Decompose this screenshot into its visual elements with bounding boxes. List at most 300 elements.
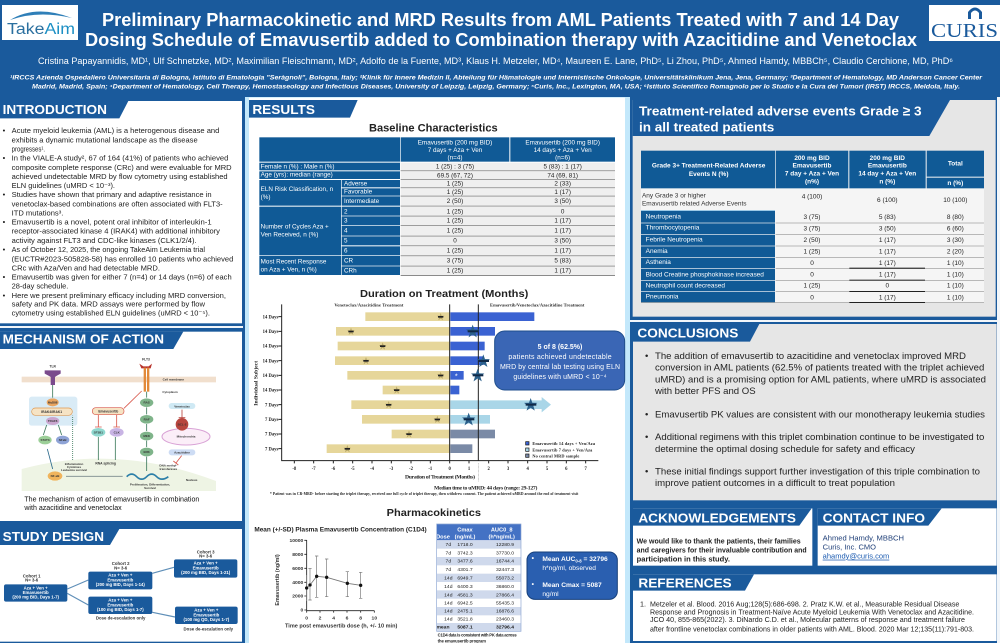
table: baseline characteristics: 3 (75) <box>447 258 463 265</box>
line chart: plasma concentration: 8 <box>359 615 362 621</box>
table: PK parameters: 14d <box>444 584 453 590</box>
introduction bullet text: Acute myeloid leukemia (AML) is a heterogenous disease and <box>12 126 219 135</box>
mechanism caption <box>23 495 199 512</box>
cohort flow boxes: Aza + Ven + <box>108 598 133 603</box>
introduction bullet text: ITD mutations³. <box>12 208 63 217</box>
signalling nodes: Mitochondria <box>177 435 196 439</box>
table: baseline characteristics: Intermediate <box>344 198 380 205</box>
table: PK parameters: 7d <box>446 559 451 565</box>
title <box>85 10 917 50</box>
panel: treatment-related adverse events <box>633 100 996 317</box>
table: adverse events: Anemia <box>646 248 668 255</box>
table: adverse events: 1 (25) <box>804 248 820 255</box>
table: PK parameters: 6949.7 <box>457 576 473 582</box>
table: baseline characteristics: 2 (33) <box>554 181 571 188</box>
introduction bullet text: • <box>3 245 6 254</box>
table: baseline characteristics: 1 (17) <box>554 228 571 235</box>
axis labels: Individual Subject <box>253 361 259 406</box>
table: baseline characteristics: 2 (50) <box>447 198 463 205</box>
table: adverse events: 1 (10) <box>947 294 964 301</box>
table: adverse events: 1 (17) <box>879 271 896 278</box>
signalling nodes: Nucleus <box>186 478 198 482</box>
axis labels: -6 <box>331 467 336 472</box>
signalling nodes: Venetoclax <box>174 404 190 408</box>
panel: contact info: CONTACT INFO <box>823 510 925 525</box>
uMRD stars <box>462 325 537 425</box>
table: PK parameters: (ng/mL) <box>455 535 475 541</box>
introduction bullet text: progresses¹. <box>12 144 45 153</box>
introduction bullet text: • <box>3 217 6 226</box>
callout: mean PK values: Mean AUC <box>542 556 575 563</box>
introduction bullet text: composite complete response (CRc) and were evaluable for MRD <box>12 163 232 172</box>
table: baseline characteristics: 1 (25) <box>447 228 463 235</box>
cohort flow boxes: (100 mg QD, Days 1-7) <box>183 617 230 622</box>
chart legend <box>526 441 596 458</box>
table: adverse events: 8 (80) <box>947 214 964 221</box>
logo: Curis: CURIS <box>931 20 998 42</box>
table: adverse events: Neutropenia <box>646 214 681 221</box>
table: PK parameters: (h*ng/mL) <box>488 535 515 541</box>
table: adverse events: Any Grade 3 or higher <box>642 192 707 199</box>
panel: conclusions: Emavusertib PK values are consistent with our monotherapy leukemia studies <box>655 409 985 420</box>
table: adverse events: 2 (50) <box>804 237 820 244</box>
table: adverse events: Febrile Neutropenia <box>646 237 703 244</box>
panel: contact info: ahamdy@curis.com <box>823 552 889 561</box>
axis labels: 7 Days <box>265 447 279 452</box>
table: baseline characteristics: 1 (25) <box>447 248 463 255</box>
table: adverse events: Total <box>948 160 963 167</box>
introduction bullet text: • <box>3 154 6 163</box>
table: adverse events: 1 (10) <box>947 260 964 267</box>
cohort labels: N= 3-6 <box>199 554 213 559</box>
panel: study design <box>0 529 242 642</box>
table: adverse events: 200 mg BID <box>870 155 905 162</box>
table: PK parameters: 3742.3 <box>457 550 473 556</box>
table: baseline characteristics: ELN Risk Classification, n <box>261 186 334 193</box>
heading: baseline characteristics: Baseline Characteristics <box>369 122 498 134</box>
table: PK parameters: 36860.0 <box>496 584 514 590</box>
line chart: plasma concentration: 4 <box>332 615 335 621</box>
cohort flow boxes: (200 mg BID, Days 1-14) <box>96 582 145 587</box>
table: adverse events: Grade 3+ Treatment-Related Adverse <box>652 163 766 170</box>
callout: 5 of 8 uMRD <box>495 331 625 390</box>
chart phase labels: Venetoclax/Azacitidine Treatment <box>334 302 404 307</box>
cohort flow boxes <box>4 559 238 624</box>
table: adverse events: Pneumonia <box>646 294 679 301</box>
table: baseline characteristics: on Aza + Ven, n (%) <box>261 267 317 274</box>
panel: contact info: Ahmed Hamdy, MBBCH <box>823 533 904 542</box>
panel: acknowledgements: participation in this study. <box>637 556 730 563</box>
line chart: plasma concentration: Emavusertib (ng/ml) <box>275 554 281 606</box>
callout: mean PK values: • <box>532 581 535 588</box>
table: adverse events: 1 (25) <box>804 283 820 290</box>
table: baseline characteristics: 1 (25) <box>447 268 463 275</box>
table: adverse events: 3 (75) <box>804 214 820 221</box>
header band <box>0 0 1000 97</box>
panel: acknowledgements: and caregivers for their invaluable contribution and <box>637 548 807 555</box>
chart phase labels: Emavusertib/Venetoclax/Azacitidine Treatment <box>490 302 585 307</box>
signalling nodes: RNA splicing <box>95 461 116 465</box>
chart phase labels <box>334 302 585 307</box>
heading: adverse events <box>633 100 950 136</box>
table: PK parameters: 55073.2 <box>496 576 514 582</box>
authors: Cristina Papayannidis, MD¹, Ulf Schnetzke, MD², Maximilian Fleischmann, MD², Adolfo de la Fuente, MD³, Klaus H. Metzeler, MD⁴, Maureen E. Lane, PhD⁵, Li Zhou, PhD⁵, Ahmed Hamdy, MBBCh⁵, Claudio Cerchione, MD, PhD⁶ <box>38 56 953 66</box>
panel: conclusions: determine the optimal dosing schedule for safety and efficacy <box>655 444 915 455</box>
table: adverse events: 1 (17) <box>879 294 896 301</box>
axis labels: 14 Days <box>263 389 279 394</box>
callout: mean PK values: 0-8 <box>575 558 582 563</box>
cohort labels <box>23 549 234 631</box>
cohort flow arrows <box>67 567 175 617</box>
table: adverse events: Emavusertib <box>793 163 831 170</box>
signalling nodes: NFκB <box>59 438 67 442</box>
table: PK parameters: 32796.4 <box>496 625 514 631</box>
introduction bullet text: Emavusertib is a novel, potent oral inhibitor of interleukin-1 <box>12 217 212 226</box>
callout: mean PK values: Mean Cmax = 5087 <box>542 582 602 589</box>
PK table footnote <box>438 632 517 643</box>
introduction bullet text: ELN guidelines (uMRD < 10⁻³). <box>12 181 115 190</box>
cohort labels: N= 3-6 <box>114 565 128 570</box>
table: adverse events: 3 (50) <box>879 226 896 233</box>
cohort flow boxes: Aza + Ven + <box>108 573 133 578</box>
chart legend: Emavusertib 7 days + Ven/Aza <box>532 447 593 452</box>
line chart: plasma concentration: 4000 <box>292 580 304 586</box>
axis labels: 5 <box>546 467 549 472</box>
mechanism caption: with azacitidine and venetoclax <box>23 504 122 512</box>
receptor: FLT3 <box>139 358 152 392</box>
table: baseline characteristics: (n=4) <box>448 155 462 162</box>
heading: adverse events: Treatment-related adverse events Grade ≥ 3 <box>639 104 922 119</box>
axis labels: Median time to uMRD: 44 days (range: 29-127) <box>434 484 537 491</box>
table: PK parameters: 14d <box>444 576 453 582</box>
introduction bullet text: • <box>3 126 6 135</box>
callout: 5 of 8 uMRD: MRD by central lab testing using ELN <box>500 364 620 371</box>
logo: TakeAim: Take Aim <box>7 21 75 38</box>
cohort labels: Cohort 1 <box>23 573 41 578</box>
heading: results <box>249 100 358 118</box>
pathway arrows <box>43 385 185 476</box>
signalling nodes: MEK <box>143 434 151 438</box>
panel: conclusions: • <box>645 351 648 362</box>
table: PK parameters: Cmax <box>457 528 474 534</box>
table: baseline characteristics: 74 (69, 81) <box>547 173 578 180</box>
panel: conclusions: improve patient outcomes in a difficult to treat population <box>655 478 895 489</box>
heading: pharmacokinetics: Pharmacokinetics <box>387 508 481 519</box>
table: PK parameters: 4581.3 <box>457 592 473 598</box>
mechanism caption: The mechanism of action of emavusertib in combination <box>24 495 199 503</box>
heading: introduction: INTRODUCTION <box>3 102 107 117</box>
table: baseline characteristics: 3 (50) <box>554 198 571 205</box>
panel: results <box>245 97 630 643</box>
table: baseline characteristics: Number of Cycles Aza + <box>261 224 329 231</box>
panel: conclusions: • <box>645 409 648 420</box>
signalling nodes: NF-κB <box>51 474 60 478</box>
introduction bullet text: venetoclax-based combinations are often associated with FLT3- <box>12 199 223 208</box>
cohort labels: Cohort 3 <box>197 549 215 554</box>
introduction bullet text: CRc with Aza/Ven and had detectable MRD. <box>12 263 160 272</box>
cohort flow boxes: Aza + Ven + <box>24 585 48 590</box>
table: PK parameters: 5087.1 <box>457 625 473 631</box>
table: adverse events: Emavusertib <box>868 163 907 170</box>
title: Dosing Schedule of Emavusertib added to Combination therapy with Azacitidine and Venetoclax <box>85 30 917 50</box>
axis labels: 14 Days <box>263 315 279 320</box>
table: baseline characteristics: 1 (25) <box>447 181 463 188</box>
panel: references <box>633 574 997 641</box>
panel: conclusions: uMRD) and is a promising option for AML patients, where uMRD is associated <box>655 375 986 386</box>
line chart: plasma concentration: 0 <box>301 608 304 614</box>
table: adverse events: Neutrophil count decreased <box>646 282 725 289</box>
cohort flow boxes: Emavusertib <box>107 577 134 582</box>
axis labels <box>253 315 587 496</box>
table: baseline characteristics: 5 <box>344 238 348 245</box>
introduction bullet text: achieved undetectable MRD by flow cytometry using established <box>12 172 228 181</box>
table: adverse events: 1 (10) <box>947 271 964 278</box>
table: PK parameters: 14d <box>444 601 453 607</box>
table: adverse events: 0 <box>810 271 814 278</box>
axis labels: 7 Days <box>265 418 279 423</box>
introduction bullet text: receptor-associated kinase 4 (IRAK4) with additional inhibitory <box>12 227 220 236</box>
logo: TakeAim <box>2 5 78 40</box>
table: PK parameters: 23460.3 <box>496 617 514 623</box>
panel: references: REFERENCES <box>638 576 732 591</box>
table: baseline characteristics: 1 (17) <box>554 218 571 225</box>
table: PK parameters: 37730.0 <box>496 550 514 556</box>
table: PK parameters: 4301.7 <box>457 567 473 573</box>
axes <box>278 304 598 463</box>
table: PK parameters: 14d <box>444 617 453 623</box>
panel: conclusions: conversion in AML patients (62.5% of patients treated with the triplet achieved <box>655 363 984 374</box>
line chart: plasma concentration: 2 <box>319 615 322 621</box>
signalling nodes: IRAK4/IRAK1 <box>41 410 62 414</box>
heading: mechanism of action: MECHANISM OF ACTION <box>3 331 164 346</box>
signalling nodes: Leukemia survival <box>61 468 87 472</box>
signalling nodes: ERK <box>144 450 151 454</box>
callout: mean PK values: ng/ml <box>542 591 559 598</box>
cohort flow boxes: (100 mg BID, Days 1-7) <box>97 607 144 612</box>
callout: mean PK values: • <box>532 555 535 562</box>
table: baseline characteristics: 1 (25) : 3 (75) <box>436 164 474 171</box>
table: baseline characteristics: Adverse <box>344 181 368 188</box>
panel: acknowledgements: We would like to thank the patients, their families <box>637 538 801 545</box>
axis labels: 7 Days <box>265 403 279 408</box>
affiliations <box>10 74 983 90</box>
panel: conclusions: The addition of emavusertib to azacitidine and venetoclax improved MRD <box>655 351 966 362</box>
cohort flow boxes: Emavusertib <box>23 590 49 595</box>
chart legend: No central MRD sample <box>532 453 579 458</box>
signalling nodes: Azacitidine <box>174 451 190 455</box>
cohort flow boxes: Emavusertib <box>193 612 220 617</box>
line chart: plasma concentration <box>254 527 427 630</box>
signalling nodes: Proliferation, Differentiation, <box>130 483 170 487</box>
table: PK parameters: 7d <box>446 550 451 556</box>
signalling nodes: MyD88 <box>48 400 58 404</box>
introduction bullet text: (EUCTR#2023-505828-58) has enrolled 10 patients who achieved <box>12 254 233 263</box>
panel: acknowledgements <box>633 508 812 566</box>
table: baseline characteristics: 1 (17) <box>554 248 571 255</box>
axis labels: 4 <box>526 467 529 472</box>
affiliations: ¹IRCCS Azienda Ospedaliero Universitaria di Bologna, Istituto di Ematologia "Seràgnoli", Bologna, Italy; ²Klinik für Innere Medizin II, Abteilung für Hämatologie und Internistische Onkologie, Universitätsklinikum Jena, Jena, Germany; ³Department of Hematology, MD Anderson Cancer Center <box>10 74 983 82</box>
signalling nodes: TRAF6 <box>48 419 58 423</box>
signalling nodes: CLK <box>114 430 121 434</box>
logo: Curis <box>929 5 1000 42</box>
table: PK parameters <box>436 524 521 631</box>
cohort flow boxes: Emavusertib <box>193 565 219 570</box>
axis labels: 14 Days <box>263 330 279 335</box>
heading: introduction <box>0 101 128 118</box>
mechanism diagram <box>22 358 216 512</box>
introduction bullet text: exhibits a dynamic mutational landscape as the disease <box>12 135 198 144</box>
table: PK parameters: 16876.6 <box>496 609 514 615</box>
table: baseline characteristics: 1 (25) <box>447 218 463 225</box>
table: PK parameters: 7d <box>446 567 451 573</box>
affiliations: Madrid, Madrid, Spain; ⁴Department of Hematology, Cell Therapy, Hemostaseology and Infectious Diseases, University of Leipzig, Leipzig, Germany; ⁵Curis, Inc., Lexington, MA, USA; ⁶Istituto Scientifico Romagnolo per lo Studio e la Cura dei Tumori (IRST) IRCCS, Meldola, Italy. <box>32 84 960 90</box>
table: adverse events: 1 (10) <box>947 283 964 290</box>
table: PK parameters: mean <box>436 625 450 631</box>
introduction bullet text: Studies have shown that primary and adaptive resistance in <box>12 190 212 199</box>
signalling nodes: RAF <box>144 417 150 421</box>
table: PK parameters: 32447.3 <box>496 567 514 573</box>
axis labels: 6 <box>565 467 568 472</box>
table: baseline characteristics <box>259 137 615 276</box>
table: adverse events: Events N (%) <box>689 171 728 178</box>
line chart: plasma concentration: 8000 <box>292 552 304 558</box>
table: adverse events: n (%) <box>879 178 895 185</box>
table: adverse events: Emavusertib related Adverse Events <box>642 200 747 207</box>
axis labels: 7 Days <box>265 433 279 438</box>
panel: references: Metzeler et al. Blood. 2016 Aug;128(5):686-698. 2. Pratz K.W. et al., Measurable Residual Disease <box>650 601 959 609</box>
introduction bullet text: As of October 12, 2025, the ongoing TakeAim Leukemia trial <box>12 245 205 254</box>
emavusertib treatment bars: * <box>455 371 458 380</box>
line chart: plasma concentration: 0 <box>305 615 308 621</box>
panel: conclusions: Additional regimens with this triplet combination continue to be investigated to <box>655 432 984 443</box>
introduction bullet text: • <box>3 291 6 300</box>
cohort labels: Cohort 2 <box>112 561 130 566</box>
signalling nodes: Emavusertib <box>98 409 118 413</box>
table: PK parameters: 6942.5 <box>457 601 473 607</box>
introduction bullet text: In the VIALE-A study², 67 of 164 (41%) of patients who achieved <box>12 154 228 163</box>
table: PK parameters: 7d <box>446 542 451 548</box>
introduction bullet text: activity against FLT3 and CDC-like kinases (CLK1/2/4). <box>12 236 197 245</box>
table: adverse events: 0 <box>810 294 814 301</box>
duration on treatment chart <box>253 289 625 496</box>
line chart: plasma concentration: 10000 <box>289 538 304 544</box>
table: PK parameters: 14d <box>444 592 453 598</box>
table: baseline characteristics: 3 <box>344 218 348 225</box>
table: adverse events: 6 (100) <box>877 197 898 204</box>
panel: acknowledgements: ACKNOWLEDGEMENTS <box>638 510 796 525</box>
line chart: plasma concentration: Mean (+/-SD) Plasma Emavusertib Concentration (C1D4) <box>254 527 427 533</box>
introduction bullet text: Emavusertib was given for either 7 (n=4) or 14 days (n=6) of each <box>12 273 232 282</box>
axis labels: -1 <box>428 467 433 472</box>
signalling nodes: Cell membrane <box>163 377 184 381</box>
table: adverse events: n (%) <box>947 180 963 187</box>
table: adverse events: 3 (75) <box>804 226 820 233</box>
signalling nodes: SF3B1 <box>94 430 103 434</box>
callout: 5 of 8 uMRD: 5 of 8 (62.5%) <box>538 344 582 351</box>
table: baseline characteristics: CRh <box>344 268 357 275</box>
line chart: plasma concentration: 2000 <box>292 594 304 600</box>
axis labels: 3 <box>507 467 510 472</box>
table: adverse events: 1 (17) <box>879 260 896 267</box>
table: baseline characteristics: Emavusertib (200 mg BID) <box>418 139 492 146</box>
introduction bullet text: Here we present preliminary efficacy including MRD conversion, <box>12 291 226 300</box>
line chart: plasma concentration: 10 <box>372 615 377 621</box>
table: baseline characteristics: CR <box>344 258 354 265</box>
table: PK parameters: 2475.1 <box>457 609 473 615</box>
panel: conclusions: CONCLUSIONS <box>637 325 738 340</box>
introduction bullet text: safety and PK data. MRD assays were performed by flow <box>12 300 206 309</box>
panel: contact info: Curis, Inc. CMO <box>823 542 876 551</box>
chart legend: Emavusertib 14 days + Ven/Aza <box>532 441 596 446</box>
heading: results: RESULTS <box>252 102 315 117</box>
axis labels: 1 <box>468 467 471 472</box>
axis labels: Duration of Treatment (Months) <box>405 474 475 481</box>
table: PK parameters: AUC0_8 <box>491 528 513 534</box>
signalling nodes: transferases <box>159 467 178 471</box>
table: PK parameters: 1718.0 <box>457 542 473 548</box>
panel: conclusions: • <box>645 467 648 478</box>
receptor: FLT3: FLT3 <box>142 358 150 362</box>
cohort flow boxes: (200 mg BID, Days 1-21) <box>181 570 231 575</box>
panel: conclusions: • <box>645 432 648 443</box>
table: baseline characteristics: Female n (%) : Male n (%) <box>261 164 335 171</box>
table: adverse events: 0 <box>810 260 814 267</box>
table: baseline characteristics: 1 (25) <box>447 189 463 196</box>
beige prior-treatment bars <box>327 312 449 453</box>
emavusertib treatment bars <box>450 312 551 453</box>
axis labels: -5 <box>351 467 355 472</box>
table: adverse events: (n%) <box>805 178 819 185</box>
table: baseline characteristics: 5 (83) : 1 (17) <box>543 164 582 171</box>
table: baseline characteristics: Favorable <box>344 189 373 196</box>
panel: contact info <box>818 508 997 566</box>
table: PK parameters: 14d <box>444 609 453 615</box>
heading: adverse events: in all treated patients <box>639 120 774 135</box>
cohort labels: N= 3-6 <box>25 578 39 583</box>
table: baseline characteristics: (n=6) <box>555 155 570 162</box>
axis labels: -4 <box>370 467 375 472</box>
introduction bullet text: cytometry using established ELN guidelines (uMRD < 10⁻⁵). <box>12 309 210 318</box>
heading: duration on treatment: Duration on Treatment (Months) <box>360 289 528 300</box>
panel: conclusions: These initial findings support further investigation of this triple combination to <box>655 467 980 478</box>
table: adverse events: 10 (100) <box>943 197 967 204</box>
axis labels: 14 Days <box>263 374 279 379</box>
table: adverse events: Blood Creatine phosphokinase increased <box>646 272 764 279</box>
signalling nodes: BCL-2 <box>178 422 187 426</box>
table: adverse events: 3 (30) <box>947 237 964 244</box>
table: adverse events: 2 (20) <box>947 248 964 255</box>
introduction bullet text: 28-day schedule. <box>12 282 68 291</box>
panel: references: JCO 40, 855-865(2022). 3. DiNardo C.D. et al., Molecular patterns of response and treatment failure <box>650 616 965 624</box>
cohort flow boxes: Aza + Ven + <box>194 561 218 566</box>
table: adverse events: 200 mg BID <box>794 155 830 162</box>
signalling nodes: DNA methyl- <box>159 464 177 468</box>
introduction bullet text: • <box>3 273 6 282</box>
table: baseline characteristics: 0 <box>453 238 457 245</box>
axis labels: 14 Days <box>263 359 279 364</box>
table: baseline characteristics: 0 <box>561 208 565 215</box>
signalling nodes: RAS <box>144 401 150 405</box>
cohort flow boxes: Emavusertib <box>107 602 134 607</box>
table: baseline characteristics: 2 <box>344 208 348 215</box>
MRD markers on prior treatment <box>344 313 444 452</box>
signalling nodes: STAT3 <box>40 438 50 442</box>
axis labels: 2 <box>488 467 491 472</box>
table: adverse events: Thrombocytopenia <box>646 225 700 232</box>
table: baseline characteristics: 6 <box>344 248 348 255</box>
cohort flow boxes: Aza + Ven + <box>194 608 219 613</box>
table: PK parameters: 3477.6 <box>457 559 473 565</box>
